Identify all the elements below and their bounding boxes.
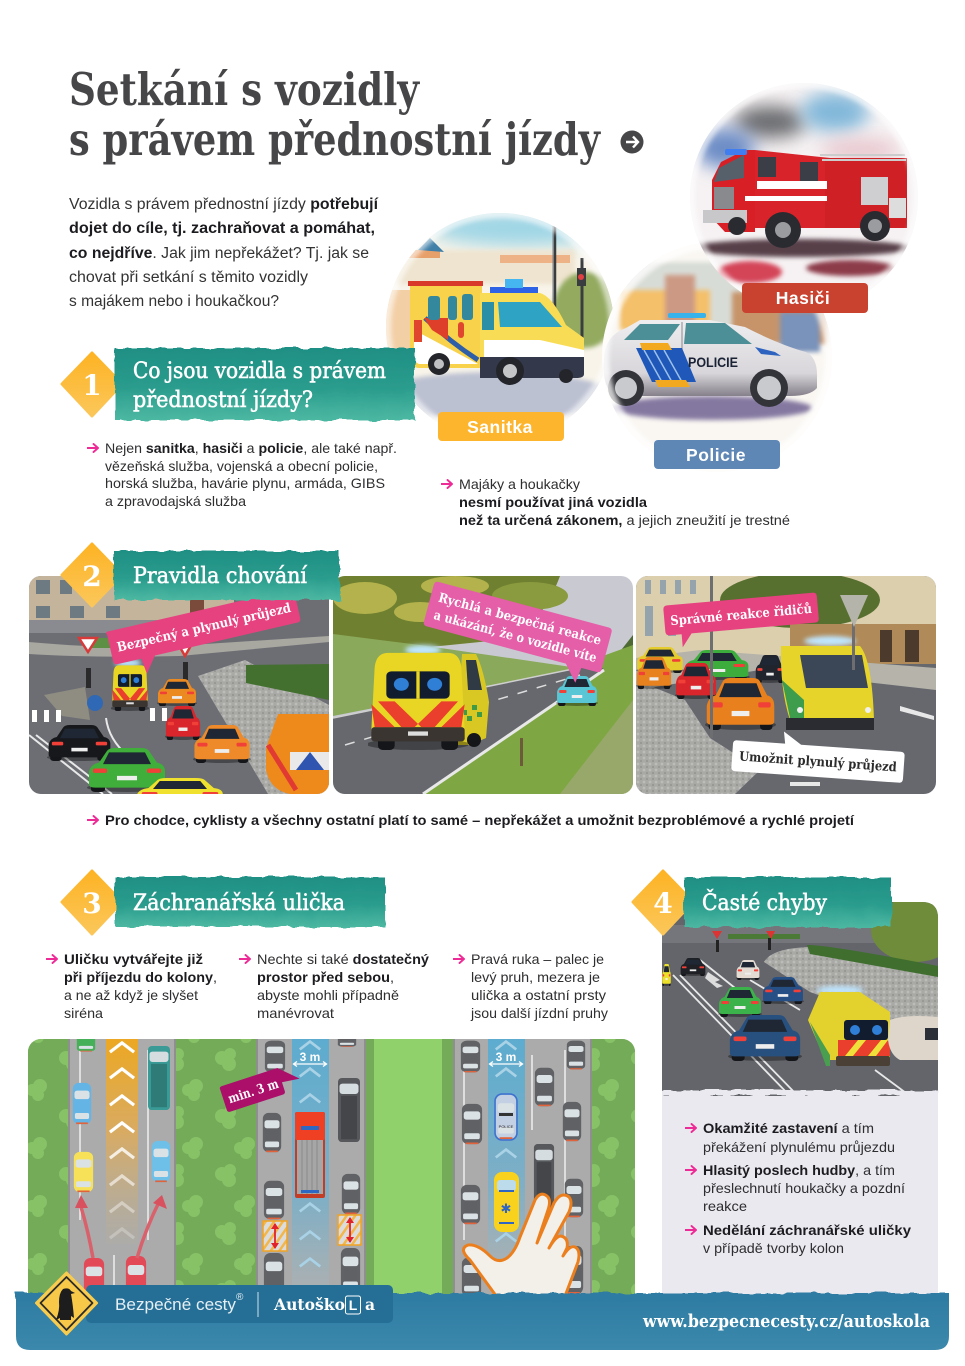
badge 2: 2 [82, 560, 102, 593]
bullet: which vehicles: vězeňská služba, vojenská a obecní policie, [105, 458, 378, 474]
callout: min. 3 m [219, 1062, 303, 1113]
footer band [16, 1293, 949, 1350]
badge 3 [62, 871, 122, 934]
section 2 heading [62, 544, 340, 606]
intro text: chovat při setkání s těmito vozidly [69, 269, 308, 286]
bullet: no corridor: Nedělání záchranářské uličky [703, 1222, 911, 1238]
bullet: beacons and sirens: než ta určená zákonem, a jejich zneužití je trestné [459, 512, 790, 528]
icon: penguin road sign [36, 1273, 96, 1334]
section 1 heading: přednostní jízdy? [133, 388, 313, 413]
road 2 [256, 1039, 366, 1285]
bullet: loud music: reakce [703, 1198, 747, 1214]
intro text [69, 196, 379, 310]
intro text: s majákem nebo i houkačkou? [69, 293, 279, 310]
illustration: fire engine circle [694, 84, 914, 292]
photo panel: quick reaction [333, 576, 633, 794]
section 3 heading: Záchranářská ulička [133, 891, 345, 916]
badge 1 [62, 353, 122, 416]
bullet: leave enough space: Nechte si také dostatečný [257, 951, 429, 967]
road 3 [453, 1039, 592, 1294]
bullet: leave enough space: abyste mohli případně [257, 987, 399, 1003]
bullet: sudden stop: překážení plynulému průjezdu [703, 1139, 895, 1155]
section 4 heading [633, 871, 891, 934]
badge 1: 1 [82, 369, 102, 402]
intro text: Vozidla s právem přednostní jízdy potřebují [69, 196, 379, 213]
section 2 heading: Pravidla chování [133, 564, 308, 589]
logo bar: Bezpečné cesty [115, 1295, 237, 1314]
photo panel: driver reaction [636, 572, 936, 794]
badge 2 [62, 544, 122, 606]
bullet: right hand rule: jsou další jízdní pruhy [470, 1005, 608, 1021]
police car top view [495, 1094, 517, 1140]
website url: www.bezpecnecesty.cz/autoskola [642, 1311, 930, 1332]
bullet: sudden stop [686, 1120, 895, 1155]
bullet: loud music [686, 1162, 905, 1214]
width label 3 m: 3 m [496, 1050, 516, 1064]
bullet: no corridor: v případě tvorby kolon [703, 1240, 844, 1256]
bullet: loud music: přeslechnutí houkačky a pozdní [703, 1180, 905, 1196]
title: Setkání s vozidly [69, 63, 421, 116]
bullet: leave enough space: prostor před sebou , [257, 969, 394, 985]
label: Sanitka [438, 412, 564, 441]
bullet: beacons and sirens: nesmí používat jiná vozidla [459, 494, 647, 510]
label: Hasiči: Hasiči [776, 288, 830, 308]
photo: common mistakes [662, 898, 959, 1096]
diagram: emergency corridor on motorway [28, 1039, 635, 1295]
callout: safe passage: Bezpečný a plynulý průjezd [116, 601, 292, 656]
bullet: which vehicles: Nejen sanitka, hasiči a policie, ale také např. [105, 440, 397, 456]
section 1 heading: Co jsou vozidla s právem [133, 359, 386, 384]
bullet: right hand rule: Pravá ruka – palec je [471, 951, 604, 967]
note: pedestrians and cyclists: Pro chodce, cyklisty a všechny ostatní platí to samé – nepřekážet a umožnit bezproblémové a rychlé projetí [105, 812, 855, 828]
logo bar: a [365, 1295, 375, 1314]
bullet: form the alley early: při příjezdu do kolony , [64, 969, 217, 985]
callout: safe passage [106, 589, 305, 681]
callout: quick reaction: a ukázání, že o vozidle víte [432, 608, 598, 666]
illustration: police circle: POLICIE [688, 355, 738, 370]
bullet: no corridor [686, 1222, 911, 1256]
badge 4 [633, 871, 693, 934]
badge 4: 4 [653, 887, 673, 920]
section 1 heading [62, 348, 415, 420]
bullet: which vehicles [88, 440, 397, 509]
intro text: co nejdříve. Jak jim nepřekážet? Tj. jak se [69, 245, 369, 262]
bullet: form the alley early: Uličku vytvářejte již [64, 951, 203, 967]
illustration: police circle [602, 250, 830, 444]
fire engine top view [295, 1112, 325, 1198]
road 1 [68, 1039, 176, 1290]
label: Sanitka: Sanitka [467, 417, 533, 437]
logo bar [86, 1285, 393, 1323]
bullet: loud music: Hlasitý poslech hudby , a tím [703, 1162, 895, 1178]
logo bar: ® [236, 1292, 244, 1303]
width label 3 m [294, 1050, 326, 1066]
bullet: form the alley early: siréna [64, 1005, 103, 1021]
photo panel: safe passage [29, 576, 329, 808]
callout: driver reaction: Správné reakce řidičů [670, 602, 813, 629]
bullet: leave enough space: manévrovat [257, 1005, 334, 1021]
bullet: form the alley early [46, 951, 217, 1021]
callout: quick reaction: Rychlá a bezpečná reakce [437, 591, 603, 649]
width label 3 m [490, 1050, 522, 1066]
bullet: right hand rule: ulička a ostatní prsty [471, 987, 606, 1003]
callout: driver reaction [663, 592, 820, 649]
title: s právem přednostní jízdy [69, 113, 602, 166]
bullet: beacons and sirens [442, 476, 790, 528]
callout: smooth passage: Umožnit plynulý průjezd [739, 750, 897, 775]
clearance markers [263, 1215, 361, 1251]
bullet: form the alley early: a ne až když je slyšet [64, 987, 198, 1003]
callout: quick reaction [419, 581, 613, 688]
label: Policie [654, 440, 780, 469]
callout: smooth passage [731, 728, 906, 783]
icon: arrow in circle [620, 130, 644, 154]
ambulance top view [494, 1172, 519, 1232]
label: Hasiči [742, 283, 868, 313]
section 3 heading [62, 871, 385, 934]
icon: right hand [463, 1194, 579, 1304]
police car top view: POLICE [499, 1124, 514, 1129]
bullet: right hand rule [454, 951, 608, 1021]
panel: common mistakes [662, 902, 938, 1294]
logo bar: L [349, 1297, 358, 1313]
title [69, 63, 602, 166]
badge 3: 3 [82, 887, 102, 920]
label: Policie: Policie [686, 445, 746, 465]
intro text: dojet do cíle, tj. zachraňovat a pomáhat, [69, 220, 375, 237]
logo bar: Autoško [273, 1295, 345, 1314]
ambulance top view: ✱ [501, 1202, 511, 1217]
bullet: beacons and sirens: Majáky a houkačky [459, 476, 580, 492]
width label 3 m: 3 m [300, 1050, 320, 1064]
bullet: right hand rule: levý pruh, mezera je [471, 969, 600, 985]
callout: min. 3 m: min. 3 m [227, 1077, 281, 1107]
bullet: leave enough space [240, 951, 429, 1021]
illustration: ambulance circle [386, 213, 612, 422]
section 4 heading: Časté chyby [702, 889, 828, 916]
bullet: which vehicles: a zpravodajská služba [105, 493, 246, 509]
bullet: sudden stop: Okamžité zastavení a tím [703, 1120, 874, 1136]
bullet: which vehicles: horská služba, havárie plynu, armáda, GIBS [105, 475, 385, 491]
